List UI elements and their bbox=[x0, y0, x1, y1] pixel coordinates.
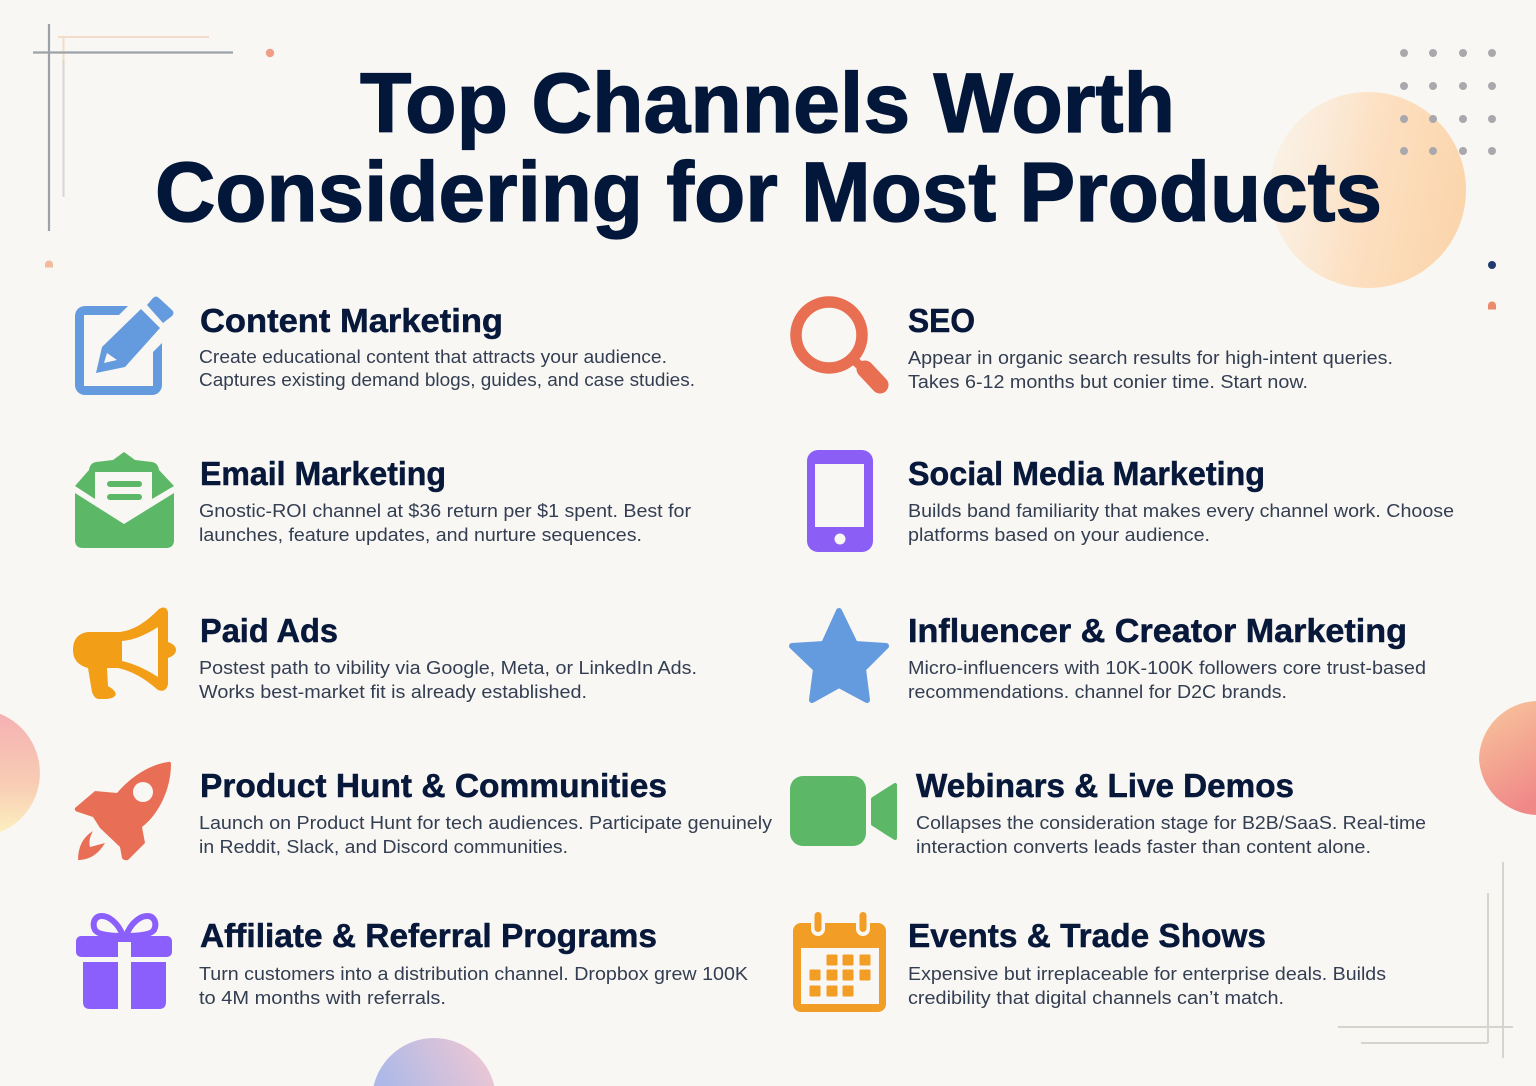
decoration: top-left corner lines bbox=[33, 24, 233, 231]
heading: Content Marketing bbox=[200, 302, 503, 339]
heading: SEO bbox=[908, 302, 975, 339]
description: Create educational content that attracts your audience. bbox=[199, 346, 667, 367]
icon: pencil and square bbox=[75, 296, 174, 395]
heading: Product Hunt & Communities bbox=[200, 767, 667, 804]
heading: Paid Ads bbox=[200, 612, 338, 649]
panel: Influencer & Creator Marketing bbox=[792, 611, 1426, 702]
description: credibility that digital channels can’t match. bbox=[908, 987, 1284, 1008]
description: Micro-influencers with 10K-100K followers core trust-based bbox=[908, 657, 1426, 678]
description: interaction converts leads faster than content alone. bbox=[916, 836, 1371, 857]
icon: rocket bbox=[75, 762, 171, 860]
decoration: right gradient circle bbox=[1479, 701, 1536, 815]
icon: smartphone bbox=[807, 450, 873, 552]
panel: Social Media Marketing bbox=[807, 450, 1454, 552]
panel: Product Hunt & Communities bbox=[75, 762, 773, 860]
description: platforms based on your audience. bbox=[908, 524, 1210, 545]
description bbox=[199, 346, 695, 390]
description: Appear in organic search results for high-intent queries. bbox=[908, 347, 1393, 368]
description bbox=[908, 963, 1386, 1008]
icon: megaphone bbox=[73, 608, 176, 699]
decoration: right dots bbox=[1488, 261, 1496, 310]
description: in Reddit, Slack, and Discord communities. bbox=[199, 836, 568, 857]
description bbox=[908, 500, 1454, 545]
decoration: bottom-right corner lines bbox=[1338, 862, 1513, 1058]
title: Top Channels Worth bbox=[360, 56, 1175, 150]
description bbox=[199, 657, 697, 702]
description: launches, feature updates, and nurture sequences. bbox=[199, 524, 642, 545]
description: Launch on Product Hunt for tech audiences. Participate genuinely bbox=[199, 812, 773, 833]
description: to 4M months with referrals. bbox=[199, 987, 446, 1008]
panel: Email Marketing bbox=[75, 452, 691, 548]
decoration: top-left dots bbox=[45, 49, 274, 267]
decoration: peach circle bbox=[1270, 92, 1466, 288]
description: recommendations. channel for D2C brands. bbox=[908, 681, 1287, 702]
heading: Social Media Marketing bbox=[908, 455, 1265, 492]
description bbox=[199, 500, 691, 545]
description: Works best-market fit is already established. bbox=[199, 681, 587, 702]
panel: SEO bbox=[796, 302, 1393, 392]
description: Gnostic-ROI channel at $36 return per $1 spent. Best for bbox=[199, 500, 691, 521]
description bbox=[199, 812, 773, 857]
title bbox=[155, 56, 1382, 239]
description bbox=[908, 657, 1426, 702]
heading: Webinars & Live Demos bbox=[916, 767, 1294, 804]
icon: magnifying glass bbox=[796, 302, 880, 385]
panel: Affiliate & Referral Programs bbox=[76, 916, 749, 1009]
description: Takes 6-12 months but conier time. Start now. bbox=[908, 371, 1308, 392]
panel: Events & Trade Shows bbox=[793, 909, 1386, 1012]
panel: Webinars & Live Demos bbox=[790, 767, 1426, 857]
description bbox=[908, 347, 1393, 392]
description: Postest path to vibility via Google, Meta, or LinkedIn Ads. bbox=[199, 657, 697, 678]
icon: calendar bbox=[793, 909, 886, 1012]
description: Captures existing demand blogs, guides, and case studies. bbox=[199, 369, 695, 390]
panel: Content Marketing bbox=[75, 296, 695, 395]
description bbox=[916, 812, 1426, 857]
description: Expensive but irreplaceable for enterprise deals. Builds bbox=[908, 963, 1386, 984]
icon: star bbox=[792, 611, 886, 700]
icon: open envelope bbox=[75, 452, 174, 548]
panel: Paid Ads bbox=[73, 608, 697, 702]
description: Builds band familiarity that makes every channel work. Choose bbox=[908, 500, 1454, 521]
heading: Events & Trade Shows bbox=[908, 917, 1266, 954]
decoration: left gradient circle bbox=[0, 714, 40, 832]
decoration: dot grid bbox=[1400, 49, 1496, 155]
heading: Email Marketing bbox=[200, 455, 446, 492]
description: Collapses the consideration stage for B2B/SaaS. Real-time bbox=[916, 812, 1426, 833]
description: Turn customers into a distribution channel. Dropbox grew 100K bbox=[199, 963, 749, 984]
title: Considering for Most Products bbox=[155, 145, 1382, 239]
icon: gift box bbox=[76, 916, 172, 1009]
description bbox=[199, 963, 749, 1008]
heading: Influencer & Creator Marketing bbox=[908, 612, 1407, 649]
icon: video camera bbox=[790, 776, 895, 846]
decoration: bottom gradient circle bbox=[374, 1038, 494, 1086]
heading: Affiliate & Referral Programs bbox=[200, 917, 657, 954]
